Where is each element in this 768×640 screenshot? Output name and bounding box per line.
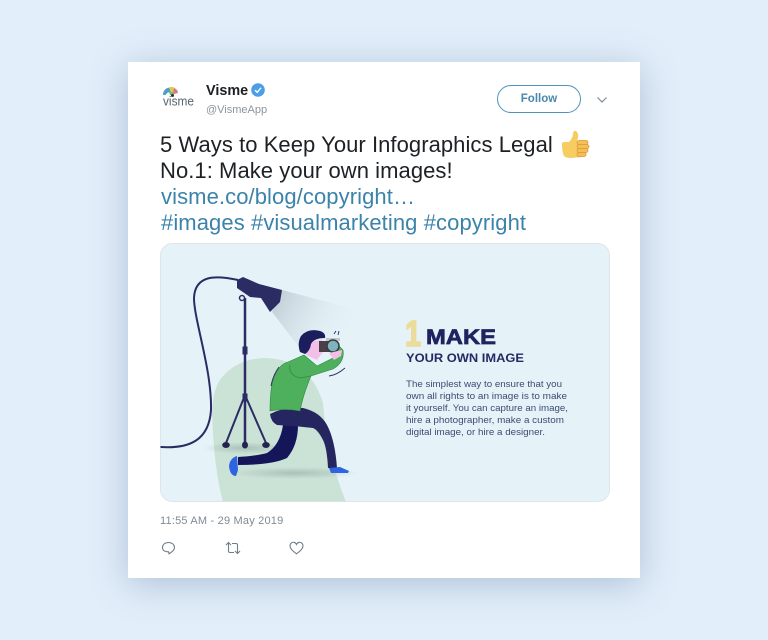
tripod stand: [226, 296, 266, 444]
tweet link and hashtags: visme.co/blog/copyright…: [161, 184, 415, 209]
lamp cable: [160, 277, 238, 447]
numeral 1: 1: [405, 313, 421, 354]
icon: chevron menu: [597, 97, 607, 103]
body copy: digital image, or hire a designer.: [406, 427, 545, 438]
illustration: photographer with studio lamp: [160, 277, 365, 502]
icon: verified badge: [251, 83, 265, 97]
blue shoes: [229, 456, 238, 476]
heading: your own image: YOUR OWN IMAGE: [406, 351, 524, 365]
sweater arm crease: [290, 365, 311, 378]
hair: [299, 330, 325, 354]
heading: MAKE: MAKE: [426, 326, 496, 349]
camera: [319, 341, 330, 352]
body copy: [406, 379, 568, 438]
tweet link and hashtags: #images #visualmarketing #copyright: [161, 210, 526, 235]
timestamp: 11:55 AM - 29 May 2019: [160, 515, 283, 527]
icon: reply: [162, 542, 175, 555]
body copy: hire a photographer, make a custom: [406, 415, 564, 426]
icon: Visme logo: [163, 86, 194, 108]
tweet headline: [160, 132, 553, 183]
light cone: [272, 290, 324, 346]
icon: Visme logo: visme: [163, 94, 194, 108]
green backdrop shape: [212, 358, 346, 502]
body copy: The simplest way to ensure that you: [406, 379, 562, 390]
icon: retweet: [226, 542, 240, 554]
follow button: Follow: [521, 93, 557, 105]
body copy: it yourself. You can capture an image,: [406, 403, 568, 414]
panel: tweet image: [160, 243, 610, 502]
face: [306, 340, 323, 360]
icon: heart: [290, 542, 304, 554]
green sweater torso: [270, 345, 343, 411]
tweet headline: 5 Ways to Keep Your Infographics Legal: [160, 132, 553, 157]
floor shadows: [210, 444, 274, 452]
tweet link and hashtags: [161, 184, 526, 235]
tweet headline: No.1: Make your own images!: [160, 158, 453, 183]
motion marks: [271, 331, 345, 386]
hands: [329, 350, 342, 360]
panel: tweet card: [128, 62, 640, 578]
lamp head: [237, 277, 282, 312]
account handle: @VismeApp: [206, 104, 267, 116]
account name: Visme: [206, 83, 248, 99]
dark rear leg: [238, 425, 298, 465]
icon: thumbs up: [562, 130, 590, 158]
front thigh and shin: [270, 408, 337, 468]
body copy: own all rights to an image is to make: [406, 391, 567, 402]
follow button: [497, 85, 581, 113]
image background: [160, 244, 610, 502]
